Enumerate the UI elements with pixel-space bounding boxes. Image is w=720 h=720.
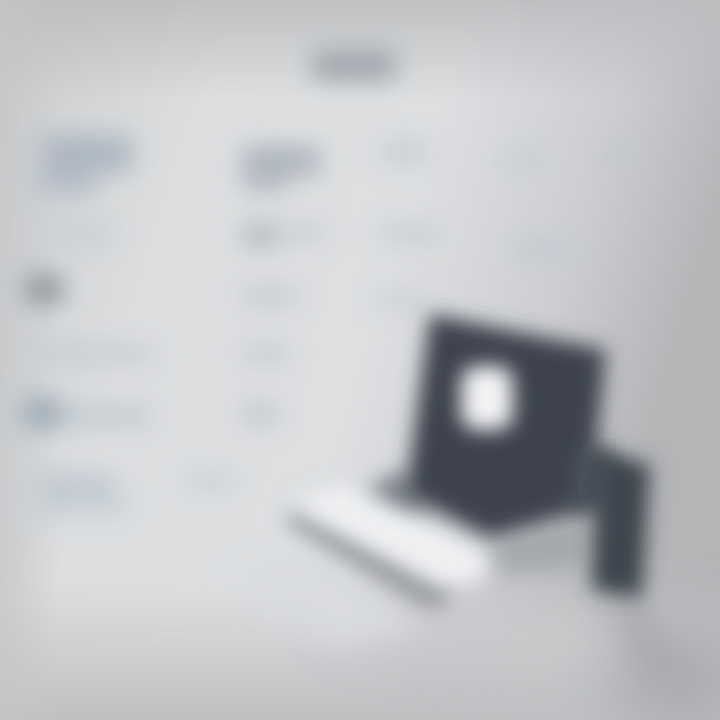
column 2 heading smudge xyxy=(242,146,320,176)
phone shadow xyxy=(600,590,700,690)
column 1 heading smudge xyxy=(42,136,132,172)
screen highlight square xyxy=(461,366,513,430)
row 3 smudges xyxy=(25,274,63,304)
phone connector to screen xyxy=(570,450,610,510)
shadow right of base xyxy=(490,522,590,575)
row 5 smudges xyxy=(22,398,62,428)
row 4 smudges xyxy=(38,344,153,364)
column 4 smudge xyxy=(502,150,548,170)
paper sheet under laptop xyxy=(225,555,420,645)
laptop xyxy=(284,314,606,610)
laptop base: shadow edge xyxy=(284,510,450,610)
laptop screen xyxy=(406,314,606,538)
laptop base: keyboard deck xyxy=(292,485,495,584)
heading smudge xyxy=(312,50,396,80)
row 6 smudges xyxy=(38,474,114,494)
phone xyxy=(570,448,700,690)
column 3 smudge xyxy=(382,140,428,164)
hinge xyxy=(366,470,430,515)
row 2 smudges xyxy=(242,222,278,248)
phone body xyxy=(592,448,650,598)
document: blurred text smudges xyxy=(22,50,638,514)
